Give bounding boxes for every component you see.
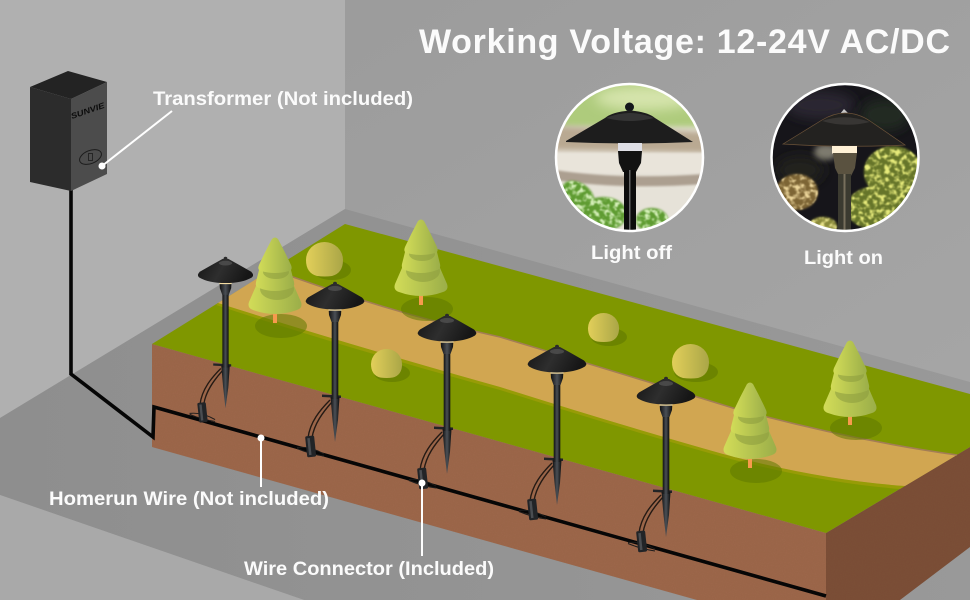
light on photo	[770, 83, 922, 236]
tree 4	[824, 340, 882, 440]
light off photo	[554, 82, 704, 232]
homerun wire	[71, 190, 826, 596]
foliage	[776, 146, 922, 235]
lamp 5	[628, 377, 695, 552]
lamp 4	[519, 345, 586, 520]
lamp	[566, 102, 693, 236]
wire connector label: Wire Connector (Included)	[244, 559, 494, 580]
lamp 1	[190, 257, 253, 423]
wire connector callout line	[418, 480, 426, 556]
title: Working Voltage: 12-24V AC/DC	[419, 23, 950, 61]
bush 4	[672, 344, 718, 382]
homerun wire callout line	[258, 434, 264, 487]
tree 3	[724, 382, 782, 483]
lamp 2	[297, 282, 364, 457]
soil block: front face	[152, 344, 826, 600]
soil block: side face	[826, 447, 970, 600]
tree 1	[248, 238, 307, 338]
lamp	[783, 109, 905, 236]
garden path	[216, 269, 957, 489]
transformer callout line	[98, 111, 172, 170]
tree 2	[394, 220, 453, 321]
lawn top surface	[152, 224, 970, 533]
brand label: SUNVIE	[70, 101, 106, 121]
transformer	[30, 71, 107, 191]
bush 1	[306, 242, 351, 280]
shrub	[562, 179, 670, 229]
light on label: Light on	[804, 248, 883, 269]
bush 2	[371, 349, 410, 382]
homerun wire label: Homerun Wire (Not included)	[49, 489, 329, 510]
bush 3	[588, 313, 627, 346]
transformer label: Transformer (Not included)	[153, 89, 413, 110]
light off label: Light off	[591, 243, 673, 264]
lamp 3	[409, 314, 476, 489]
